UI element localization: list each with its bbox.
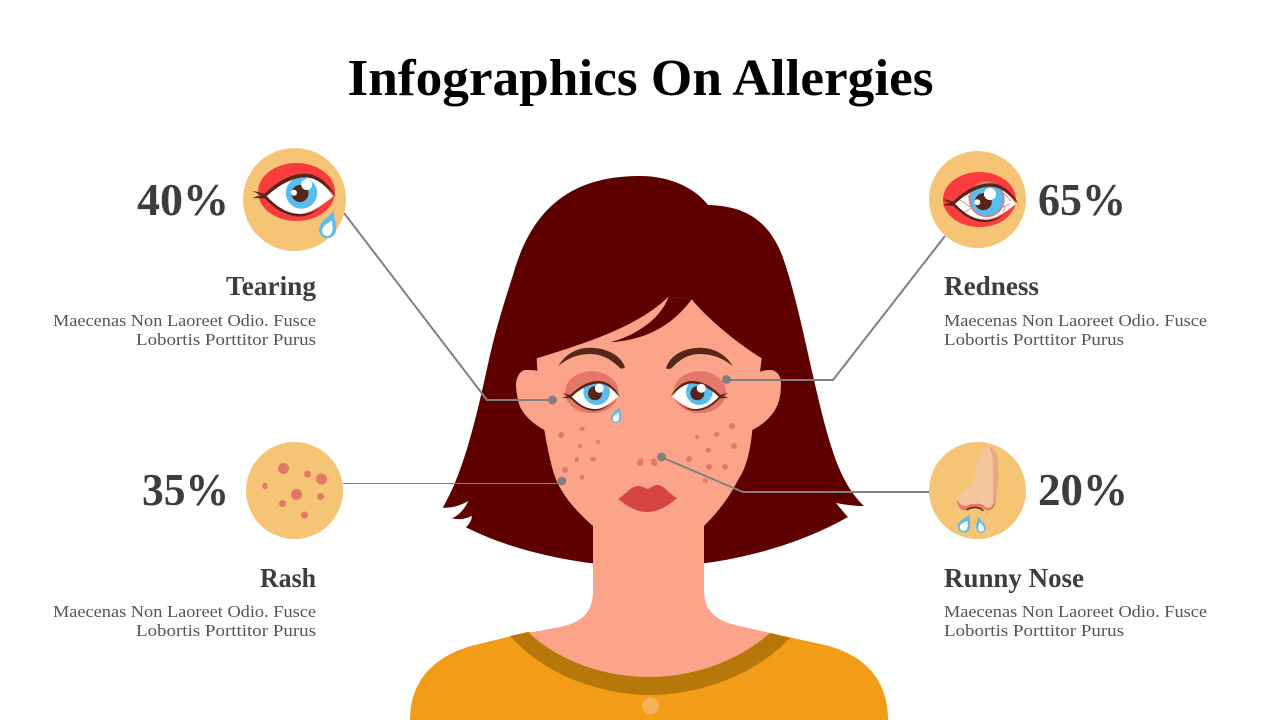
text block: runny nose: Maecenas Non Laoreet Odio. Fusce <box>944 602 1207 621</box>
percentage: 65%: 65% <box>1038 174 1126 225</box>
freckles and rash <box>558 423 737 483</box>
text block: redness: Maecenas Non Laoreet Odio. Fusce <box>944 311 1207 330</box>
shirt button <box>642 698 659 714</box>
heading: runny nose: Runny Nose <box>944 563 1084 593</box>
shirt <box>410 632 888 720</box>
percentage: 20%: 20% <box>1038 464 1128 515</box>
face <box>516 297 781 526</box>
leader line: tearing <box>344 213 557 404</box>
right eyebrow <box>666 348 733 369</box>
icon: tearing eye <box>243 148 346 251</box>
right eye <box>670 371 728 413</box>
text block: redness <box>944 311 1207 349</box>
shirt collar <box>510 632 790 695</box>
left eyebrow <box>558 348 625 369</box>
panel: redness <box>929 151 1207 349</box>
title: Infographics On Allergies <box>348 50 934 107</box>
neck <box>528 515 770 677</box>
text block: runny nose: Lobortis Porttitor Purus <box>944 621 1124 640</box>
heading: rash: Rash <box>260 563 316 593</box>
leader line: rash <box>343 477 566 485</box>
text block: runny nose <box>944 602 1207 640</box>
hair fringe sliver <box>610 297 692 342</box>
panel: rash <box>53 442 343 640</box>
icon: red eye <box>929 151 1026 248</box>
hair <box>443 176 864 567</box>
text block: tearing <box>53 311 316 349</box>
text block: rash <box>53 602 316 640</box>
icon: rash <box>246 442 343 539</box>
tear drop <box>610 405 625 424</box>
heading: tearing: Tearing <box>226 271 317 301</box>
panel: runny nose <box>929 442 1207 640</box>
panel: tearing <box>53 148 346 349</box>
leader line: runny nose <box>657 452 930 492</box>
text block: tearing: Maecenas Non Laoreet Odio. Fusce <box>53 311 316 330</box>
left eye <box>562 371 620 413</box>
lips <box>618 485 677 512</box>
percentage: 40%: 40% <box>137 174 229 225</box>
text block: tearing: Lobortis Porttitor Purus <box>136 330 316 349</box>
text block: redness: Lobortis Porttitor Purus <box>944 330 1124 349</box>
text block: rash: Maecenas Non Laoreet Odio. Fusce <box>53 602 316 621</box>
percentage: 35%: 35% <box>142 464 229 515</box>
illustration: woman with allergy symptoms <box>410 176 888 720</box>
text block: rash: Lobortis Porttitor Purus <box>136 621 316 640</box>
leader line: redness <box>722 236 945 384</box>
icon: runny nose <box>929 442 1026 539</box>
heading: redness: Redness <box>944 271 1039 301</box>
